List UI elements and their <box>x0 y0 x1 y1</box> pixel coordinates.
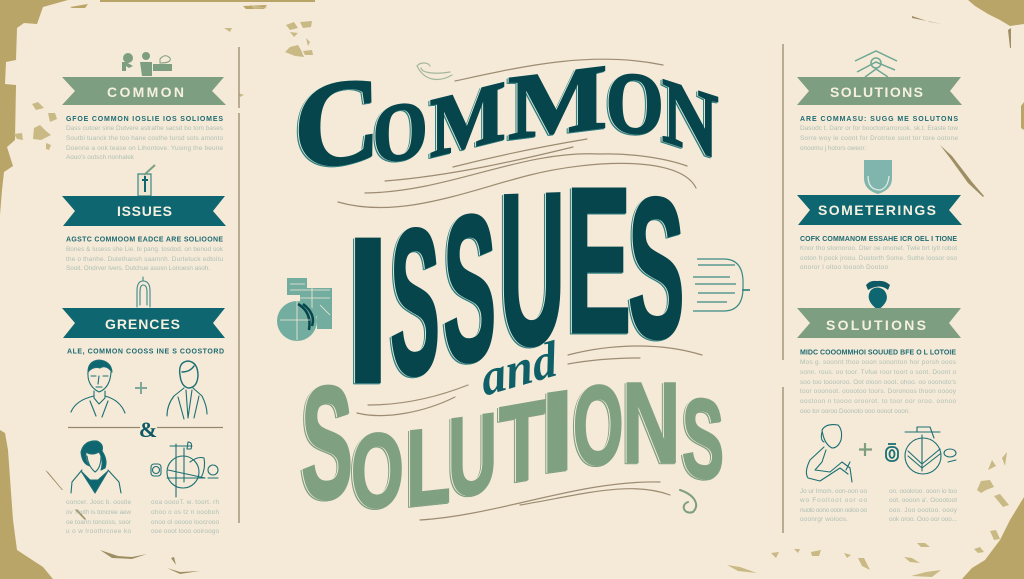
text block: common: Dass cutoer sine Dutvere astrathe sacsd bo tom bases <box>66 125 223 132</box>
text block: solutions lower: Mos g. soonnt thoo ooon sononton hor porsh ooos <box>800 359 956 366</box>
banner: common: COMMON <box>107 84 184 100</box>
text block: solutions lower: toor ooonoot. ooootoo toors. Doronoos thoon ooooy <box>800 388 957 395</box>
title: solutions: T <box>499 377 545 508</box>
text block: under diagram left: onoo ol ooooo loocrooo <box>151 519 219 526</box>
text block: issues: AGSTC COMMOOM EADCE ARE SOLIOONE <box>66 236 223 244</box>
flourishes: upper <box>338 59 696 208</box>
title: solutions: S <box>682 375 724 504</box>
banner: issues <box>62 196 226 226</box>
banner: solutions lower <box>797 308 961 338</box>
text block: common: GFOE COMMON IOSLIE IOS SOLIOMES <box>66 116 223 123</box>
ampersand divider: & <box>139 417 157 442</box>
text block: under diagram right: oot. oooon a'. Ooootoot <box>889 497 957 504</box>
banner: issues: ISSUES <box>117 203 172 219</box>
banner: someterings <box>797 195 962 225</box>
text block: under diagram left: ooa ooooT. w. toort. rh <box>151 499 219 506</box>
text block: solutions lower <box>800 350 957 415</box>
icon: plus <box>135 382 147 394</box>
icon: bricks and globe <box>277 278 332 341</box>
icon: shield arc <box>868 176 889 190</box>
text block: under portrait right: wo Fooltoot oor oo <box>799 497 867 504</box>
icon: man with crossed arms <box>806 425 852 482</box>
title: common: N <box>662 58 718 178</box>
icon: wheel diagram <box>151 442 218 497</box>
text block: solutions lower: sonn. rous. oo toor. Tvfue roor toort o sont. Doont o <box>800 369 956 376</box>
right divider <box>782 44 784 533</box>
text block: under portrait right: ooonrgr woloos. <box>800 516 848 523</box>
text block: under diagram left: ooe ooot looo ooiroogo <box>151 528 219 535</box>
text block: under diagram right <box>889 488 958 523</box>
title: common: O <box>373 83 427 181</box>
text block: under portrait right: nuoto oono ooon ooloo oo <box>800 507 867 514</box>
text block: solutions lower: ooo tor ooroo Doonoto ooo oooot ooon. <box>800 408 910 415</box>
icon: woman portrait <box>71 441 121 493</box>
banner: grences: GRENCES <box>105 316 180 332</box>
title: and: and <box>478 330 561 407</box>
text block: under diagram right: on. oookroo. ooon io too <box>889 488 957 495</box>
text block: solutions: ARE COMMASU: SUGG ME SOLUTONS <box>800 116 958 123</box>
title: issues: S <box>443 171 496 407</box>
text block: under diagram right: ooo. Joo oootoo. oooy <box>889 507 958 514</box>
title: issues: E <box>566 145 631 377</box>
text block: issues: Bones & Iusess she Lie. bi pang. tosdod. on benod sok <box>66 246 224 253</box>
title: solutions: O <box>573 362 624 489</box>
banner: someterings: SOMETERINGS <box>818 202 936 218</box>
text block: under diagram right: ook oroo. Ooo oor ooo... <box>889 516 957 523</box>
text block: common: Doenne a onk tease on Lihontove. Yusing the beune <box>66 145 223 152</box>
text block: under diagram left: ohoo o os tz n oooboh <box>151 509 219 516</box>
text block: someterings: onoror I oltoo looooh Dootoo <box>800 264 888 271</box>
text block: under portraits left: ov Tooth is toncree aew <box>66 509 131 516</box>
text block: someterings: COFK COMMANOM ESSAHE ICR OEL I TIONE <box>800 236 957 243</box>
text block: solutions: onoomu j hotors oweor. <box>800 145 866 152</box>
icon: shield <box>864 160 892 194</box>
text block: common <box>66 116 223 161</box>
text block: solutions: Sorre woy le coont for Drotrtoe soot tor tore ootone <box>800 135 958 142</box>
text block: solutions <box>800 116 958 152</box>
text block: solutions lower: oostoon n toooo oroorot. to toor oor oroo. oonoo <box>800 398 956 405</box>
banner: solutions <box>797 77 962 105</box>
left divider <box>238 47 240 523</box>
text block: solutions lower: MIDC COOOMMHOI SOUUED BFE O L LOTOIE <box>800 350 956 356</box>
text block: under portrait right <box>799 488 867 523</box>
icon: glass with pen <box>138 165 155 196</box>
text block: solutions lower: soo too tooooroo. Oot oloon ooot. ohoo. oo ooonoto's <box>800 379 956 386</box>
text block: issues: Sooit. Ondrver Ivers. Dutchue asosn Lonuesn asoh. <box>66 265 210 272</box>
icon: suited person <box>167 361 207 419</box>
text heading: grences: ALE, COMMON COOSS INE S COOSTORD <box>67 348 224 356</box>
title: common <box>294 46 718 197</box>
title: common: M <box>508 46 607 159</box>
banner: common <box>62 77 226 105</box>
title: solutions: I <box>540 366 575 498</box>
icon: man portrait <box>71 360 125 417</box>
text block: solutions: Dasodc t. Danr or for booctorrarrorcok. sk.t. Eraste tow <box>800 125 958 132</box>
panel: right column <box>797 51 962 523</box>
icon: chevrons <box>855 51 897 77</box>
title: common: C <box>294 50 381 197</box>
icon: teal drop <box>866 281 890 310</box>
text block: someterings <box>800 236 957 271</box>
text block: someterings: Knor tho stornoroo. Dter oe ononet. Twle brt iytl robot <box>800 245 957 252</box>
text block: common: Soutbi tuanck the too hane costhe tursd sots amonto <box>66 135 223 142</box>
title: solutions: S <box>301 351 353 533</box>
text block: under portraits left: ooncer. Jooc b. oostle <box>66 499 131 506</box>
panel: left column <box>62 52 226 535</box>
text block: under diagram left <box>151 499 219 535</box>
title: issues <box>345 145 685 426</box>
flourishes: lower <box>357 346 702 520</box>
title: solutions: N <box>622 358 680 486</box>
icon: wheel with hat <box>905 427 956 474</box>
title: common: O <box>606 55 664 153</box>
text block: under portraits left: u o w lroothrcnee ko <box>66 528 131 535</box>
icon: arch <box>137 277 150 307</box>
text block: under portraits left <box>66 499 132 535</box>
title: solutions: L <box>406 403 451 529</box>
title: issues: I <box>345 194 391 426</box>
title: solutions: U <box>448 389 497 521</box>
text block: common: Aouo's outsch nonhalek <box>66 154 135 161</box>
text block: issues <box>66 236 224 272</box>
title: issues: U <box>499 147 565 392</box>
title: issues: S <box>390 185 440 420</box>
icon: people and kettle <box>122 52 172 76</box>
text block: under portraits left: oe toann toncoss, soor <box>66 519 132 526</box>
title: solutions: O <box>351 410 404 531</box>
banner: solutions: SOLUTIONS <box>830 84 923 100</box>
icon: ring <box>886 444 898 461</box>
title: common: M <box>430 63 506 176</box>
icon: paddle <box>693 259 750 311</box>
icon: plus right <box>859 443 872 456</box>
title: solutions <box>301 351 724 533</box>
text block: someterings: ooton h pock jroou. Dustorth Some. Suthe loosor oso <box>800 255 957 262</box>
banner: solutions lower: SOLUTIONS <box>826 317 926 333</box>
title: issues: S <box>628 155 685 381</box>
text block: issues: the o thanhe. Dutethansh saamnh. Durtetuck edtoitu <box>66 256 223 263</box>
text block: under portrait right: Jo ur Imom. oon-oon oo <box>800 488 867 495</box>
banner: grences <box>62 308 225 338</box>
